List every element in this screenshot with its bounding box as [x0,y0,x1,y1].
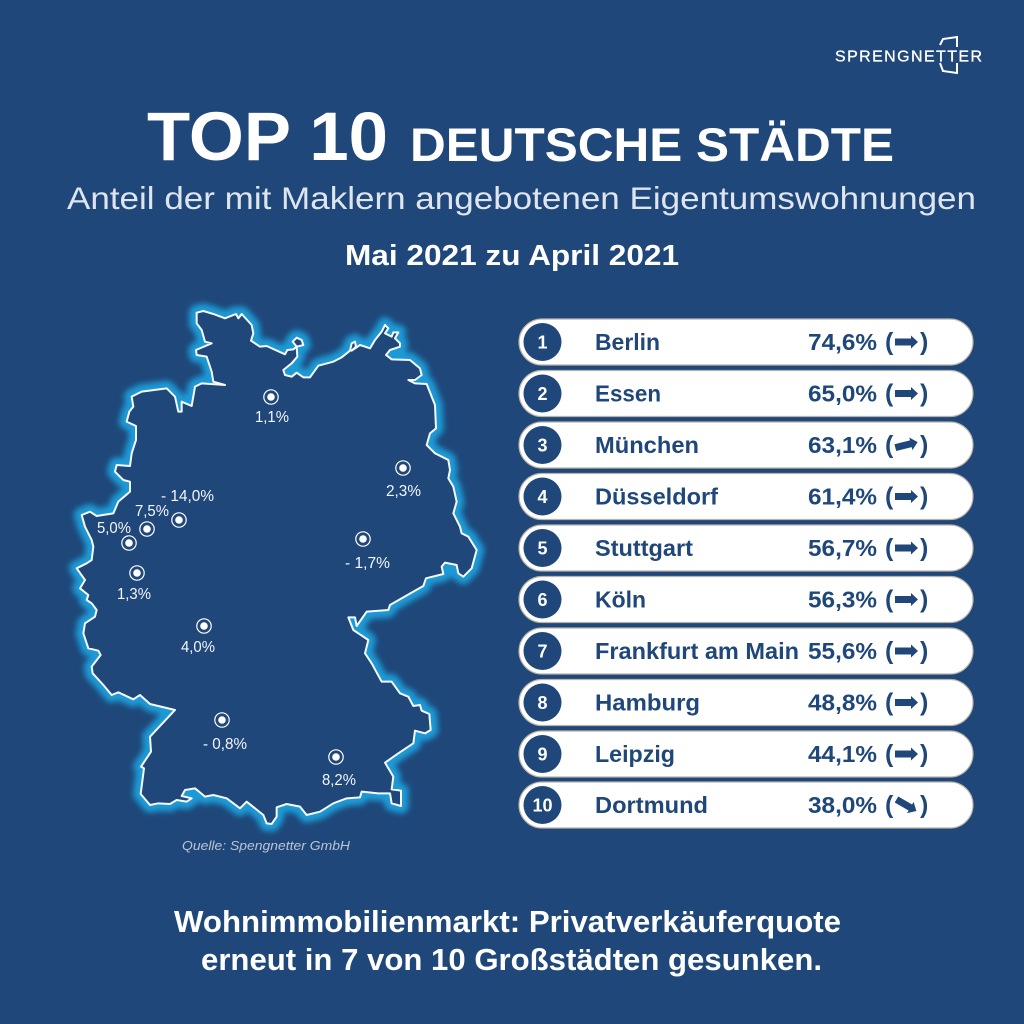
map of Germany [77,311,477,824]
row 3: München: ) [920,431,928,459]
closing statement [174,905,841,977]
marker: 2,3% [386,461,421,500]
row 6: Köln [519,576,973,622]
marker: 1,1% [255,390,289,426]
row 9: Leipzig: 9 [537,744,548,764]
marker: 4,0%: 4,0% [181,639,215,656]
row 7: Frankfurt am Main: Frankfurt am Main [595,638,799,664]
row 6: Köln: ) [920,586,928,614]
row 7: Frankfurt am Main [519,628,973,674]
row 3: München: ( [885,431,894,459]
map glow outline [77,311,477,824]
logo: Sprengnetter [835,37,982,73]
row 7: Frankfurt am Main: ) [920,637,928,665]
marker: -14,0% [161,488,214,527]
marker: 2,3%: 2,3% [386,483,421,500]
title [147,98,894,175]
title: DEUTSCHE STÄDTE [410,118,894,171]
row 9: Leipzig: ) [920,740,928,768]
row 6: Köln: 6 [537,590,548,610]
marker: 7,5%: 7,5% [135,503,169,520]
row 6: Köln: Köln [595,586,646,612]
marker: 5,0%: 5,0% [97,520,131,537]
title: TOP 10 [147,98,388,175]
source note: Quelle: Spengnetter GmbH [182,838,351,853]
row 4: Düsseldorf [519,474,973,520]
row 2: Essen: 65,0% [808,380,877,406]
row 6: Köln: ( [885,586,894,614]
row 2: Essen: Essen [595,380,661,406]
row 8: Hamburg: ) [920,688,928,716]
marker: 1,3% [117,566,151,603]
row 6: Köln: 56,3% [808,586,877,612]
row 3: München: München [595,432,699,458]
row 3: München: 63,1% [808,432,877,458]
marker: 8,2% [322,750,356,789]
row 2: Essen: 2 [537,384,548,404]
marker: -0,8% [203,713,247,753]
subtitle: Anteil der mit Maklern angebotenen Eigentumswohnungen [67,180,976,216]
row 5: Stuttgart: Stuttgart [595,535,693,561]
row 1: Berlin: 1 [537,332,548,352]
closing statement: erneut in 7 von 10 Großstädten gesunken. [201,943,822,977]
marker: -0,8%: - 0,8% [203,736,247,753]
period heading: Mai 2021 zu April 2021 [345,240,679,272]
row 2: Essen [519,370,973,416]
row 1: Berlin [519,319,973,365]
row 1: Berlin: ( [885,328,894,356]
row 8: Hamburg: 8 [537,693,548,713]
marker: -1,7% [345,532,390,572]
row 10: Dortmund [519,782,973,828]
row 9: Leipzig: Leipzig [595,741,675,767]
row 2: Essen: ( [885,380,894,408]
row 10: Dortmund: 10 [532,796,553,816]
row 1: Berlin: ) [920,328,928,356]
marker: -1,7%: - 1,7% [345,555,390,572]
row 3: München: 3 [537,436,548,456]
row 1: Berlin: 74,6% [808,329,877,355]
row 8: Hamburg: Hamburg [595,690,700,716]
row 10: Dortmund: ) [920,791,928,819]
row 7: Frankfurt am Main: 55,6% [808,638,877,664]
row 2: Essen: ) [920,380,928,408]
row 4: Düsseldorf: Düsseldorf [595,484,718,510]
row 9: Leipzig: 44,1% [808,741,877,767]
row 5: Stuttgart: 5 [537,538,548,558]
row 7: Frankfurt am Main: ( [885,637,894,665]
closing statement: Wohnimmobilienmarkt: Privatverkäuferquote [174,905,841,939]
logo: Sprengnetter: SPRENGNETTER [835,48,982,66]
marker: 1,3%: 1,3% [117,586,151,603]
marker: 8,2%: 8,2% [322,772,356,789]
ranking list [519,319,973,828]
row 9: Leipzig [519,731,973,777]
row 3: München [519,422,973,468]
row 5: Stuttgart: ) [920,534,928,562]
marker: -14,0%: - 14,0% [161,488,214,505]
row 4: Düsseldorf: 4 [537,487,548,507]
marker: 7,5% [135,503,169,536]
row 1: Berlin: Berlin [595,329,660,355]
row 5: Stuttgart [519,525,973,571]
row 8: Hamburg: ( [885,688,894,716]
marker: 1,1%: 1,1% [255,409,289,426]
row 10: Dortmund: ( [885,791,894,819]
row 9: Leipzig: ( [885,740,894,768]
row 10: Dortmund: 38,0% [808,792,877,818]
row 8: Hamburg: 48,8% [808,690,877,716]
map land and border [77,311,477,824]
row 4: Düsseldorf: 61,4% [808,484,877,510]
row 10: Dortmund: Dortmund [595,792,708,818]
row 5: Stuttgart: ( [885,534,894,562]
marker: 4,0% [181,619,215,656]
row 8: Hamburg [519,680,973,726]
row 4: Düsseldorf: ) [920,482,928,510]
row 5: Stuttgart: 56,7% [808,535,877,561]
row 7: Frankfurt am Main: 7 [537,642,548,662]
marker: 5,0% [97,520,136,550]
row 4: Düsseldorf: ( [885,482,894,510]
